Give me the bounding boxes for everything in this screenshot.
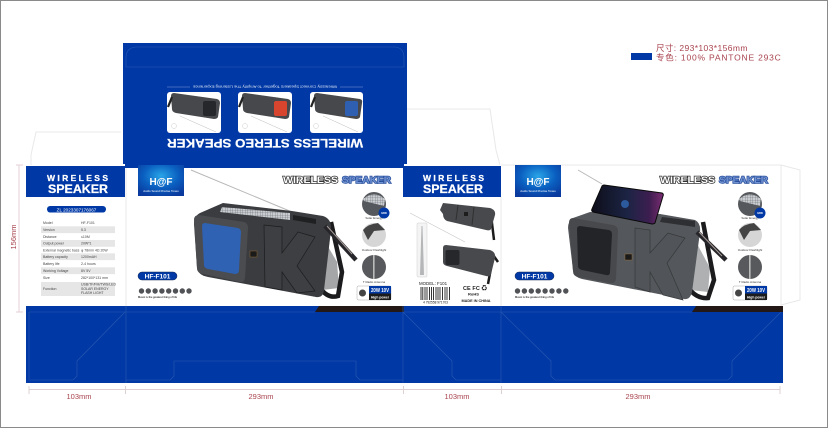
speaker front view [443,245,498,284]
product card: black speaker [167,92,221,133]
power badge: High power [371,294,389,300]
function icons [139,288,192,294]
specification table: HF-F101 [81,221,95,225]
heading: WIRELESS [660,175,715,186]
specification table: φ 78mm 4Ω 20W [81,248,108,252]
specification table: FLASH LIGHT [81,291,104,295]
certification marks [461,285,491,303]
power badge: High power [747,294,765,300]
feature: solar energy: 1800 [381,211,387,215]
specification table: 20W*1 [81,242,92,246]
panel: bottom flap band [26,306,783,383]
certification marks: MADE IN CHINA [461,299,491,303]
caption: Music is the greatest thing of life [515,295,554,299]
antenna line [410,213,465,242]
certification marks: CE FC ♻ [463,285,487,292]
model pill: HF-F101 [522,274,548,280]
side heading [47,173,108,196]
specification table [41,221,116,296]
feature: outdoor flashlight: Outdoor Flashlight [362,248,386,252]
specification table: Working Voltage [43,269,68,273]
feature: solar energy: Solar Energy [365,216,383,220]
model pill [515,272,554,280]
heading: SPEAKER [342,175,391,186]
speaker rear view [440,203,495,240]
caption: Music is the greatest thing of life [138,295,177,299]
side heading: SPEAKER [48,182,108,196]
product card: red speaker [238,92,292,133]
specification table: ≤10M [81,235,90,239]
spec note: size and spot colour: 尺寸: 293*103*156mm [656,43,748,53]
feature: radio antenna [362,255,386,284]
specification table: Battery life [43,262,60,266]
specification table: SOLAR ENERGY [81,287,109,291]
function icons [515,288,568,294]
colour swatch [631,53,652,60]
brand logo: Audio Sound Precise Tones [520,189,556,193]
model pill [138,272,177,280]
brand logo [138,165,184,196]
panel: top flap [123,43,407,164]
feature: solar energy: Solar Energy [741,216,759,220]
dieline: top tabs and side tab [31,109,800,306]
brand logo: Audio Sound Precise Tones [143,189,179,193]
speaker with blue grille [194,203,356,297]
specification table: External magnetic bass [43,248,80,252]
heading [283,175,391,186]
side heading [423,173,484,196]
specification table: Model [43,221,53,225]
product card: blue speaker [310,92,363,133]
feature: outdoor flashlight [362,223,386,252]
feature: solar energy [362,192,390,220]
specification table: Output power [43,242,65,246]
model label: MODEL: F101 [419,281,448,286]
panel: narrow side with product views [403,166,501,304]
dimension: height measure: 156mm [9,224,18,250]
speaker with phone [568,185,726,300]
panel: front face blue speaker [125,164,404,300]
heading [660,175,768,186]
specification table: Function [43,287,56,291]
certification marks: RoHS [468,292,479,296]
dimension: width measures: 103mm [66,392,92,401]
panel: front face phone speaker [515,165,768,300]
spec note: size and spot colour: 专色: 100% PANTONE 293C [656,52,782,62]
feature: radio antenna: T Radio Antenna [363,280,385,284]
brand logo: H@F [149,177,173,188]
heading: SPEAKER [719,175,768,186]
feature: outdoor flashlight [738,223,762,252]
phone [592,185,663,224]
power badge [733,286,767,300]
dimension: width measures: 293mm [625,392,651,401]
dimension: width measures: 293mm [248,392,274,401]
specification table: 2-4 hours [81,262,96,266]
feature: radio antenna [738,255,762,284]
specification table: 282*100*131 mm [81,276,108,280]
brand logo: H@F [526,177,550,188]
panel: spec side [26,166,125,296]
power badge: 20W 10V [747,288,766,294]
heading: WIRELESS [283,175,338,186]
dimension: width measures [29,386,780,401]
specification table: Size [43,276,50,280]
side heading: WIRELESS [47,173,108,183]
specification table: Distance [43,235,57,239]
feature: solar energy: 1800 [757,211,763,215]
feature: radio antenna: T Radio Antenna [739,280,761,284]
side heading: SPEAKER [423,182,483,196]
dimension: height measure [9,165,23,312]
specification table: Battery capacity [43,255,68,259]
power badge [357,286,391,300]
patent number pill: ZL 2023307176067 [57,207,97,212]
specification table: 8V 5V [81,269,91,273]
specification table: Version [43,228,55,232]
spec note: size and spot colour [631,43,782,62]
telescopic antenna view [417,223,427,277]
specification table: 1200mAH [81,255,97,259]
dimension: width measures: 103mm [444,392,470,401]
barcode: 4 792558 971703 [423,300,448,304]
tagline (inverted): Wirelessly Connect Speakers Together To Amplify The Listening Experience [193,85,337,90]
antenna [191,170,292,212]
antenna [578,170,602,184]
power badge: 20W 10V [371,288,390,294]
specification table: 5.3 [81,228,86,232]
feature: outdoor flashlight: Outdoor Flashlight [738,248,762,252]
brand logo [515,165,561,197]
heading: wireless stereo speaker (inverted): WIRELESS STEREO SPEAKER [166,136,363,148]
side heading: WIRELESS [423,173,484,183]
feature: solar energy [738,192,766,220]
specification table: USB/TF/FM/TWS/LED [81,283,116,287]
model pill: HF-F101 [145,274,171,280]
